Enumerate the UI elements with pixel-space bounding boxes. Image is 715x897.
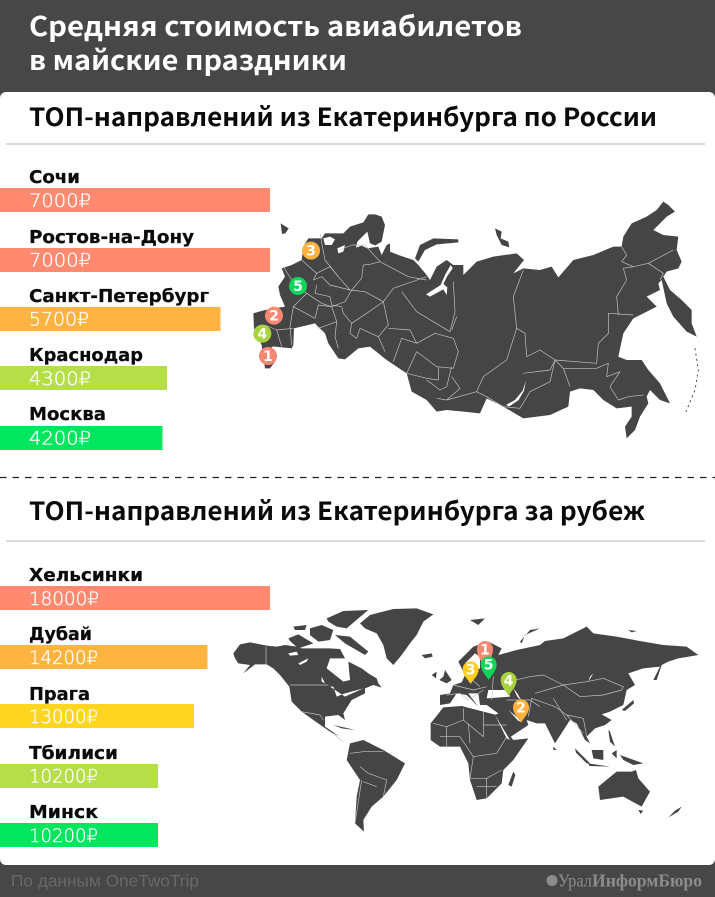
- heading: Russia: ТОП-направлений из Екатеринбурга по России: [29, 98, 657, 134]
- bar: Хельсинки: [0, 565, 270, 610]
- panel: Russia destinations: [0, 98, 705, 450]
- marker 3: Прага: [463, 661, 479, 684]
- bar: Москва: [0, 404, 162, 450]
- bar: Ростов-на-Дону: 7000₽: [29, 250, 91, 272]
- bar: Прага: Прага: [29, 684, 90, 705]
- bar: Москва: 4200₽: [29, 428, 91, 450]
- marker 1: Хельсинки: 1: [480, 642, 490, 658]
- map: Russia: [253, 202, 698, 438]
- marker 4: Тбилиси: 4: [504, 673, 514, 689]
- bar: Сочи: Сочи: [29, 167, 80, 188]
- bar: Дубай: Дубай: [29, 624, 92, 645]
- marker 1: Сочи: [259, 347, 277, 365]
- bar: Хельсинки: 18000₽: [29, 589, 99, 610]
- marker 2: Ростов-на-Дону: [265, 307, 283, 325]
- bar: Ростов-на-Дону: [0, 227, 270, 272]
- bar: Москва: Москва: [29, 404, 106, 425]
- bar: Тбилиси: 10200₽: [29, 766, 98, 788]
- heading: abroad: ТОП-направлений из Екатеринбурга за рубеж: [29, 492, 645, 528]
- bar: Минск: 10200₽: [29, 826, 98, 847]
- bar: Краснодар: 4300₽: [29, 369, 91, 390]
- bar: Санкт-Петербург: Санкт-Петербург: [29, 286, 209, 307]
- source note: По данным OneTwoTrip: [11, 872, 199, 890]
- marker 1: Хельсинки: [477, 641, 493, 668]
- marker 2: Дубай: [513, 699, 529, 723]
- bar: Санкт-Петербург: [0, 286, 220, 331]
- bar: Дубай: 14200₽: [29, 648, 98, 669]
- bar: Прага: 13000₽: [29, 707, 98, 728]
- bar: Прага: [0, 684, 194, 728]
- bar: Тбилиси: [0, 743, 158, 788]
- marker 5: Москва: [289, 277, 307, 295]
- map: world: [233, 608, 698, 832]
- bar: Сочи: [0, 167, 270, 212]
- bar: Минск: Минск: [29, 802, 98, 823]
- bar: Минск: [0, 802, 158, 847]
- marker 3: Санкт-Петербург: 3: [306, 244, 316, 260]
- logo: УралИнформБюро: Урал: [558, 870, 592, 890]
- logo: УралИнформБюро: [546, 870, 702, 890]
- title: [29, 5, 522, 78]
- bar: Краснодар: Краснодар: [29, 345, 143, 366]
- bar: Тбилиси: Тбилиси: [29, 743, 118, 764]
- marker 2: Дубай: 2: [516, 701, 526, 717]
- marker 4: Краснодар: 4: [257, 327, 267, 343]
- bar: Санкт-Петербург: 5700₽: [29, 310, 89, 330]
- marker 3: Прага: 3: [466, 663, 476, 679]
- marker 5: Москва: 5: [293, 279, 303, 295]
- bar: Ростов-на-Дону: Ростов-на-Дону: [29, 227, 194, 248]
- bar: Краснодар: [0, 345, 167, 390]
- marker 5: Минск: 5: [484, 658, 494, 674]
- marker 5: Минск: [481, 656, 497, 680]
- logo: УралИнформБюро: ИнформБюро: [592, 870, 702, 890]
- marker 2: Ростов-на-Дону: 2: [269, 309, 279, 325]
- marker 4: Краснодар: [253, 325, 271, 343]
- bar: Сочи: 7000₽: [29, 191, 91, 212]
- marker 3: Санкт-Петербург: [302, 242, 320, 260]
- marker 1: Сочи: 1: [263, 349, 273, 365]
- bar: Дубай: [0, 624, 208, 669]
- panel: international destinations: [0, 492, 705, 847]
- title: в майские праздники: [29, 39, 347, 78]
- title: Средняя стоимость авиабилетов: [29, 5, 522, 44]
- marker 4: Тбилиси: [501, 672, 517, 696]
- bar: Хельсинки: Хельсинки: [29, 565, 143, 586]
